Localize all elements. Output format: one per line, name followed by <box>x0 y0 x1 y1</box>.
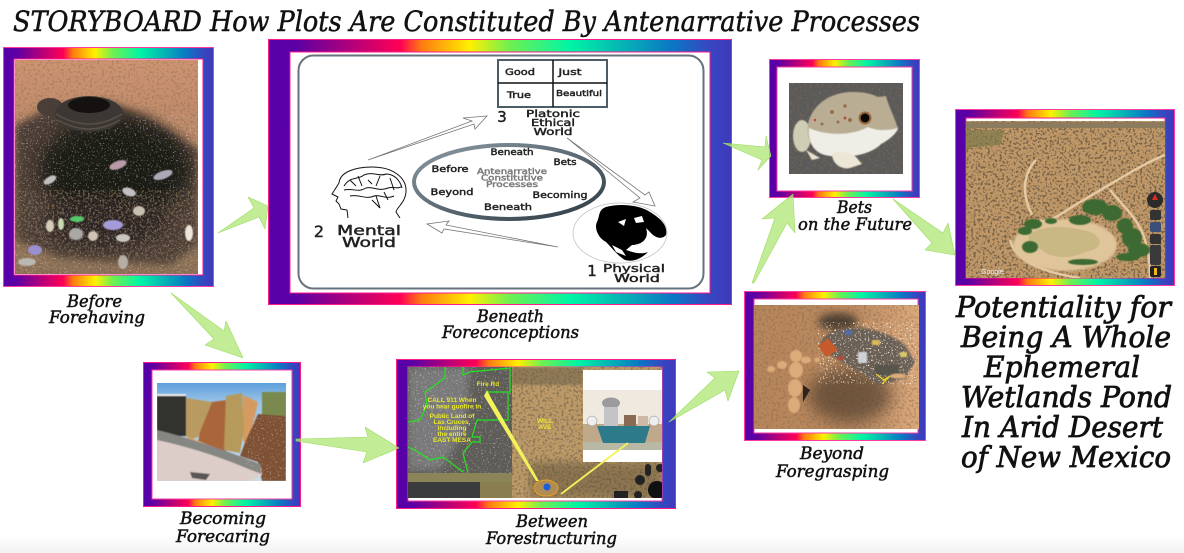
ellipse: antenarrative processes: Beneath <box>490 148 534 158</box>
caption: bets on the future: Bets <box>836 198 872 217</box>
text: potentiality statement: Ephemeral <box>983 350 1140 384</box>
caption: before forehaving: Before <box>66 292 122 311</box>
text: potentiality statement: Wetlands Pond <box>961 380 1172 414</box>
arrows: flow connectors <box>171 136 955 463</box>
label: physical world: World <box>614 272 660 285</box>
icon: globe <box>573 203 667 263</box>
ellipse: antenarrative processes: Before <box>432 165 469 175</box>
photo: spadefoot toad <box>789 83 903 174</box>
panel: becoming forecaring <box>144 362 300 506</box>
photo: aerial desert pond <box>966 121 1165 278</box>
text: potentiality statement: Potentiality for <box>955 290 1173 324</box>
arrow: beyond to bets <box>752 194 795 283</box>
inset: satellite map with boundary: CALL 911 When <box>427 397 477 404</box>
map composite <box>408 367 666 499</box>
map label: WILL <box>537 418 553 425</box>
ellipse: antenarrative processes: Antenarrative <box>477 167 547 176</box>
caption: between forestructuring <box>485 512 617 548</box>
inset: satellite map with boundary: the entire <box>437 431 467 438</box>
photo: truck and rock wall <box>157 383 286 481</box>
arrow: beneath to bets <box>723 136 771 170</box>
arrow: before to beneath <box>218 197 268 233</box>
inset: satellite map with boundary: Public Land of <box>430 413 475 420</box>
table: platonic values: True <box>506 91 531 101</box>
caption: beneath foreconceptions: Foreconceptions <box>441 323 579 342</box>
panel: wetlands pond <box>956 110 1174 286</box>
caption: beyond foregrasping: Beyond <box>799 444 864 463</box>
label: physical world <box>587 262 665 285</box>
ellipse: antenarrative processes: Processes <box>486 180 538 189</box>
text: potentiality statement: of New Mexico <box>961 440 1171 474</box>
label: platonic ethical world <box>497 108 580 138</box>
panel: between forestructuring <box>396 360 676 508</box>
label: physical world: 1 <box>587 262 597 280</box>
label: mental world <box>314 222 401 251</box>
arrow: platonic to physical <box>567 138 655 206</box>
caption: between forestructuring: Between <box>515 512 588 531</box>
ellipse: antenarrative processes: Constitutive <box>481 174 543 182</box>
panel: bets on the future <box>770 60 920 198</box>
inset: satellite map with boundary: including <box>438 425 466 432</box>
label: platonic ethical world: 3 <box>497 108 507 126</box>
photo: burnt tire and trash mound <box>15 60 198 274</box>
caption: before forehaving: Forehaving <box>48 308 145 327</box>
label: platonic ethical world: World <box>534 127 572 138</box>
ellipse: antenarrative processes: Bets <box>554 158 577 168</box>
caption: bets on the future <box>798 198 912 234</box>
panel: before forehaving <box>4 48 214 286</box>
caption: becoming forecaring: Becoming <box>179 509 266 528</box>
inset: satellite map with boundary <box>408 367 512 473</box>
caption: beyond foregrasping: Foregrasping <box>775 462 889 481</box>
text: potentiality statement: Being A Whole <box>960 320 1171 354</box>
inset: 3d model panel <box>583 370 662 462</box>
table: platonic values <box>498 60 607 107</box>
table: platonic values: Good <box>505 68 535 78</box>
map composite: AVE <box>539 424 552 431</box>
caption: bets on the future: on the Future <box>798 215 912 234</box>
inset: satellite map with boundary: you hear gunfire in <box>423 404 481 410</box>
ellipse: antenarrative processes <box>414 145 604 219</box>
arrow: before to becoming <box>171 293 243 358</box>
arrow: bets to pond <box>893 199 955 255</box>
label: platonic ethical world: Ethical <box>531 118 575 129</box>
text: potentiality statement <box>955 290 1173 474</box>
inset: satellite map with boundary: EAST MESA <box>433 437 471 444</box>
caption: becoming forecaring <box>175 509 270 546</box>
table: platonic values: Beautiful <box>556 89 602 98</box>
label: mental world: World <box>342 236 396 251</box>
photo: stone cross and burnt trash <box>754 305 919 429</box>
arrow: physical to mental <box>427 221 558 247</box>
caption: becoming forecaring: Forecaring <box>175 527 270 546</box>
caption: beneath foreconceptions <box>441 307 579 342</box>
label: mental world: Mental <box>337 224 401 239</box>
panel: beyond foregrasping <box>744 292 926 440</box>
arrow: mental to platonic <box>368 116 487 160</box>
arrow: becoming to between <box>296 427 399 463</box>
label: platonic ethical world: Platonic <box>526 109 580 120</box>
ellipse: antenarrative processes: Becoming <box>532 191 588 201</box>
caption: before forehaving <box>48 292 145 327</box>
icon: brain and head <box>332 167 406 218</box>
arrow: between to beyond <box>669 371 739 422</box>
table: platonic values: Just <box>557 68 582 78</box>
label: mental world: 2 <box>314 222 324 241</box>
inset: satellite map with boundary: Fire Rd <box>477 381 499 388</box>
photo: aerial desert pond: Google <box>981 269 1004 276</box>
title: STORYBOARD How Plots Are Constituted By Antenarrative Processes <box>13 5 920 38</box>
text: potentiality statement: In Arid Desert <box>961 410 1163 444</box>
panel: beneath foreconceptions <box>268 40 732 304</box>
diagram: three worlds <box>298 56 704 288</box>
inset: satellite map with boundary: Las Cruces, <box>434 419 471 426</box>
caption: beyond foregrasping <box>775 444 889 481</box>
label: physical world: Physical <box>603 262 665 275</box>
caption: between forestructuring: Forestructuring <box>485 529 617 548</box>
caption: beneath foreconceptions: Beneath <box>476 307 544 326</box>
map pointers <box>484 390 666 499</box>
ellipse: antenarrative processes: Beyond <box>430 188 474 198</box>
ellipse: antenarrative processes: Beneath <box>484 203 532 213</box>
